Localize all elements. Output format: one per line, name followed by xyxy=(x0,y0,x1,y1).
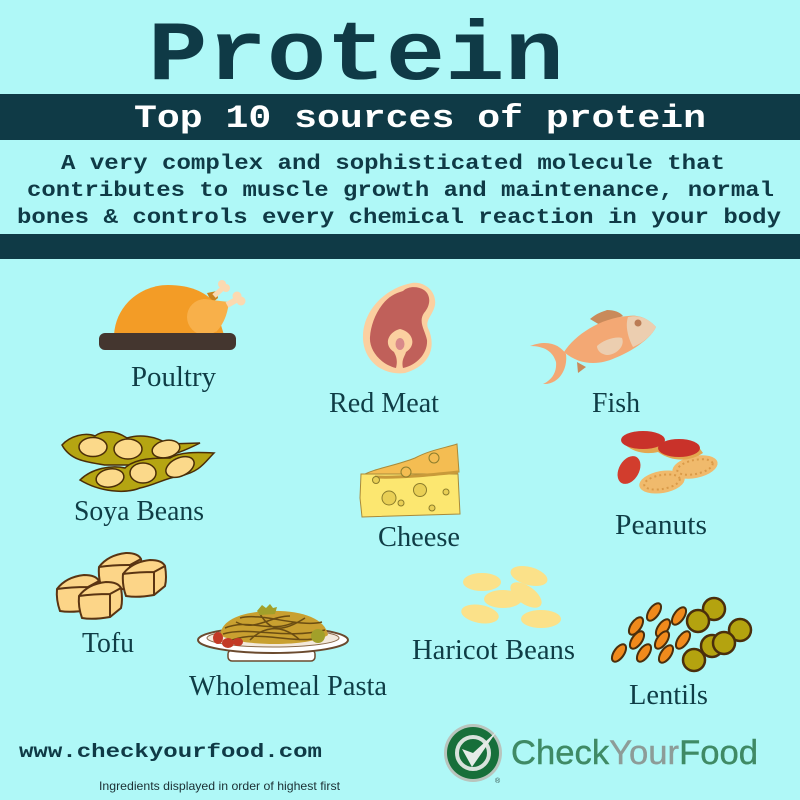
label: cheese: Cheese xyxy=(378,521,460,553)
description text: A very complex and sophisticated molecule that xyxy=(61,153,725,176)
footnote: Ingredients displayed in order of highest first xyxy=(99,779,341,793)
icon: lentils xyxy=(609,598,751,671)
icon: peanuts xyxy=(613,431,720,497)
icon: cheese xyxy=(360,444,460,517)
label: red meat: Red Meat xyxy=(329,387,439,419)
icon: haricot beans xyxy=(460,562,561,628)
label: soya beans: Soya Beans xyxy=(74,495,204,527)
label: lentils: Lentils xyxy=(629,679,708,711)
label: peanuts: Peanuts xyxy=(615,509,707,541)
label: wholemeal pasta: Wholemeal Pasta xyxy=(189,670,387,702)
description text: bones & controls every chemical reaction in your body xyxy=(17,207,781,230)
subtitle banner xyxy=(0,94,800,140)
logo: CheckYourFood: ® xyxy=(495,777,501,785)
icon: red meat xyxy=(363,283,435,373)
icon: poultry xyxy=(99,280,246,350)
website url: www.checkyourfood.com xyxy=(19,741,322,763)
icon: soya beans xyxy=(62,432,214,491)
icon: wholemeal pasta xyxy=(198,604,348,661)
label: haricot beans: Haricot Beans xyxy=(412,634,575,666)
description text: contributes to muscle growth and maintenance, normal xyxy=(27,180,774,203)
title: Protein xyxy=(148,10,564,105)
label: poultry: Poultry xyxy=(131,361,216,393)
label: fish: Fish xyxy=(592,387,640,419)
logo: CheckYourFood: CheckYourFood xyxy=(511,734,758,772)
icon: fish xyxy=(530,310,656,384)
description text xyxy=(17,153,781,230)
logo: CheckYourFood xyxy=(444,724,758,785)
label: tofu: Tofu xyxy=(82,627,134,659)
subtitle banner: Top 10 sources of protein xyxy=(134,100,706,137)
icon: tofu xyxy=(57,553,166,619)
lower divider bar xyxy=(0,234,800,259)
